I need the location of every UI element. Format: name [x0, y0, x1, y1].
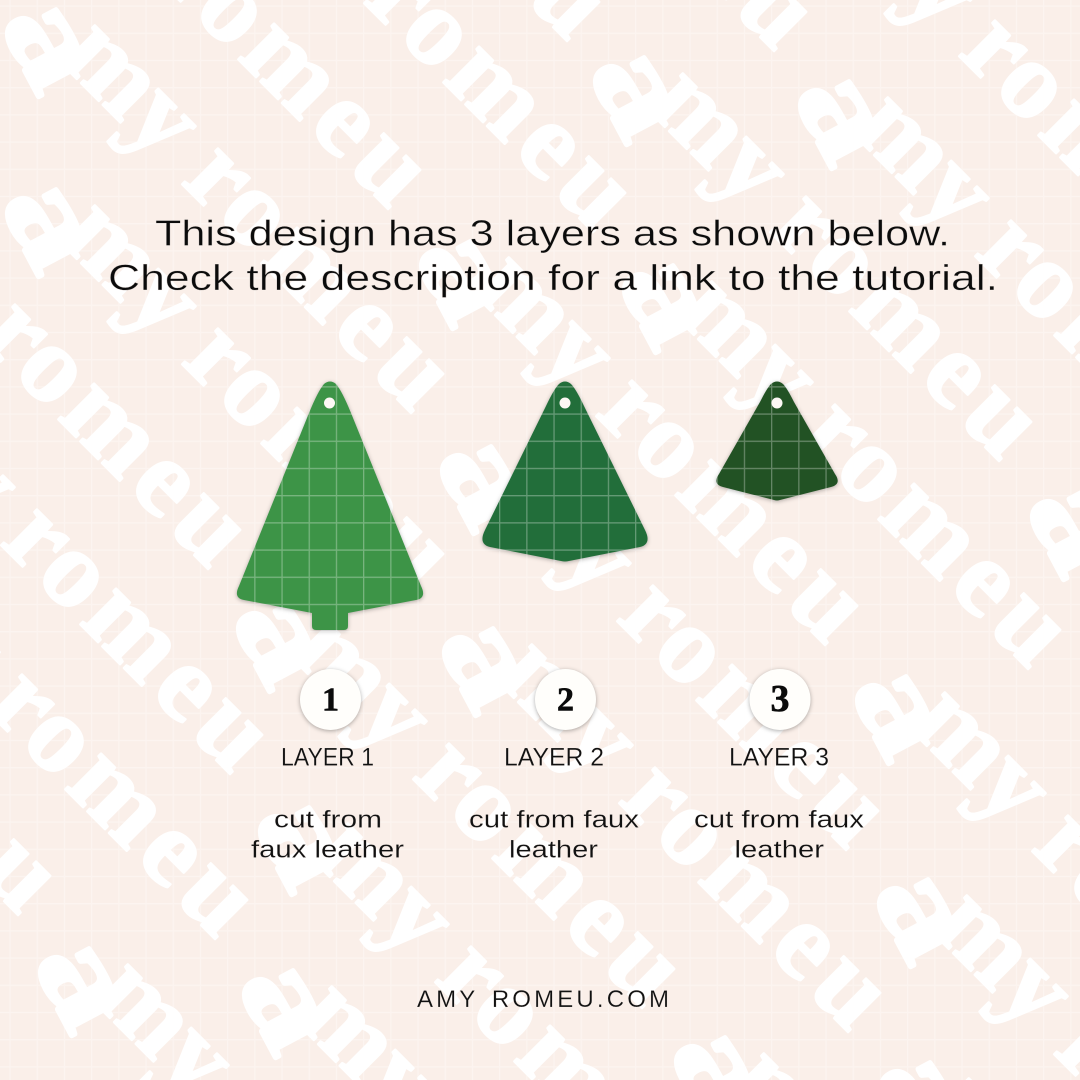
watermark pattern: amy romeu: a: [228, 770, 390, 909]
description: layer 1: cut from: [274, 806, 382, 834]
description: layer 2: cut from faux: [469, 806, 639, 834]
label: layer 2: LAYER 2: [504, 744, 604, 772]
watermark pattern: amy romeu: my romeu: [477, 609, 925, 1057]
title: Check the description for a link to the tutorial.: [108, 257, 998, 298]
watermark pattern: amy romeu: a: [8, 911, 170, 1050]
watermark pattern: amy romeu: a: [206, 567, 368, 706]
description: layer 1: faux leather: [251, 836, 404, 864]
panel: layer 1: [251, 669, 404, 864]
description: layer 3: cut from faux: [694, 806, 864, 834]
number badge 2: 2: [557, 682, 574, 718]
description: layer 2: [469, 806, 639, 864]
icon: tree layer 3: [716, 382, 838, 500]
watermark pattern: amy romeu: a: [410, 409, 572, 548]
title: [108, 212, 998, 298]
watermark pattern: amy romeu: my romeu: [271, 585, 719, 1033]
footer: website: AMY ROMEU.COM: [417, 986, 669, 1013]
watermark pattern: amy romeu: my romeu: [40, 170, 488, 618]
label: layer 3: LAYER 3: [729, 744, 829, 772]
watermark pattern: amy romeu: a: [592, 228, 754, 367]
watermark pattern: amy romeu: my romeu: [628, 38, 1076, 486]
description: layer 1: [251, 806, 404, 864]
tree hole 2: [560, 398, 570, 408]
tree hole 1: [324, 398, 335, 408]
watermark pattern: amy romeu: my romeu: [475, 427, 923, 875]
description: layer 3: [694, 806, 864, 864]
watermark pattern: amy romeu: a: [389, 204, 551, 343]
watermark pattern: amy romeu: my romeu: [40, 0, 488, 438]
number badge 3: [750, 669, 810, 730]
icon: tree layer 2: [482, 382, 648, 562]
watermark pattern: amy romeu: a: [412, 591, 574, 730]
number badge 1: 1: [322, 682, 339, 718]
number badge 2: [535, 669, 596, 730]
number badge 3: 3: [770, 678, 790, 720]
tree hole 3: [772, 398, 782, 408]
watermark pattern: amy romeu: a: [847, 842, 1009, 981]
number badge 1: [300, 669, 361, 730]
watermark pattern: amy romeu: a: [563, 20, 725, 159]
watermark pattern: amy romeu: my romeu: [454, 222, 902, 670]
watermark pattern: amy romeu: a: [212, 933, 374, 1072]
panel: layer 3: [694, 669, 864, 864]
watermark pattern: amy romeu: a: [768, 44, 930, 183]
panel: layer 2: [469, 669, 639, 864]
label: layer 1: LAYER 1: [281, 744, 374, 772]
watermark pattern: amy romeu: a: [825, 639, 987, 778]
title: This design has 3 layers as shown below.: [155, 212, 950, 254]
icon: tree layer 1: [237, 382, 423, 630]
description: layer 2: leather: [509, 836, 598, 864]
description: layer 3: leather: [734, 836, 824, 864]
